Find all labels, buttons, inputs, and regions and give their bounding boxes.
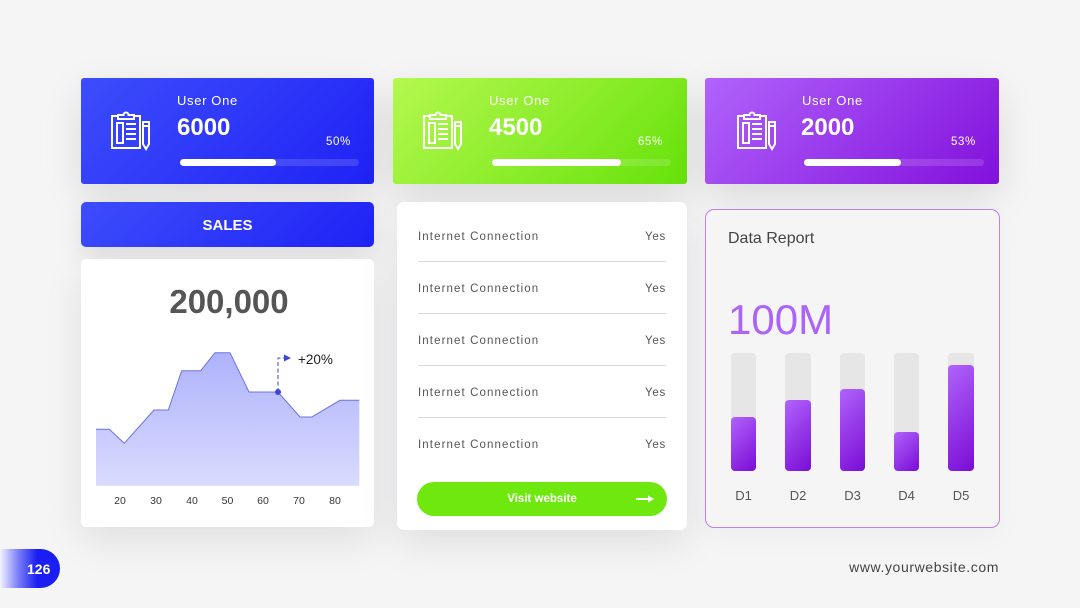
- panel: connection list: [397, 202, 687, 530]
- row 4: Yes: [645, 387, 666, 399]
- area chart: [96, 352, 360, 507]
- x axis labels: 70: [293, 495, 305, 507]
- bar D1: [731, 353, 756, 471]
- icon: arrow: [636, 496, 654, 502]
- x axis labels: 80: [329, 495, 341, 507]
- percent: 53%: [951, 136, 976, 148]
- label: user: User One: [802, 93, 863, 108]
- value: 2000: [801, 114, 854, 141]
- panel title: Data Report: [728, 230, 814, 247]
- panel: data report: [705, 209, 1000, 528]
- x axis labels: 20: [114, 495, 126, 507]
- x axis labels: [114, 495, 341, 507]
- row 1: Yes: [645, 231, 666, 243]
- bar labels: D3: [844, 488, 861, 503]
- label: user: User One: [489, 93, 550, 108]
- x axis labels: 30: [150, 495, 162, 507]
- callout value: +20%: [298, 352, 333, 367]
- icon: clipboard and pencil: [423, 112, 462, 151]
- bar D5: [948, 353, 974, 471]
- bar labels: D2: [790, 488, 806, 503]
- percent: 50%: [326, 136, 351, 148]
- x axis labels: 60: [257, 495, 269, 507]
- row 2: Yes: [645, 283, 666, 295]
- row 1: Internet Connection: [418, 231, 539, 243]
- progress bar: [180, 159, 359, 166]
- progress bar: [804, 159, 984, 166]
- icon: clipboard and pencil: [737, 112, 776, 151]
- heading: sales banner: SALES: [202, 217, 252, 234]
- panel: user card purple: [705, 78, 999, 184]
- value: 4500: [489, 114, 542, 141]
- x axis labels: 50: [222, 495, 233, 507]
- footer url: www.yourwebsite.com: [849, 559, 999, 575]
- bar labels: D5: [953, 488, 969, 503]
- panel: user card green: [393, 78, 687, 184]
- value: 6000: [177, 114, 230, 141]
- row 4: [418, 387, 666, 399]
- bar labels: D4: [898, 488, 915, 503]
- row 3: Yes: [645, 335, 666, 347]
- bar D3: [840, 353, 865, 471]
- big value: 100M: [728, 296, 833, 343]
- row 4: Internet Connection: [418, 387, 539, 399]
- row 3: Internet Connection: [418, 335, 539, 347]
- sales total: 200,000: [169, 283, 289, 320]
- percent: 65%: [638, 136, 663, 148]
- row 3: [418, 335, 666, 347]
- row 2: [418, 283, 666, 295]
- panel: sales chart: [81, 259, 374, 527]
- bar labels: D1: [735, 488, 752, 503]
- row 5: Internet Connection: [418, 439, 539, 451]
- row 1: [418, 231, 666, 243]
- bar D4: [894, 353, 919, 471]
- icon: clipboard and pencil: [111, 112, 150, 151]
- button label: Visit website: [507, 493, 577, 505]
- x axis labels: 40: [186, 495, 198, 507]
- button: visit website: [417, 482, 667, 516]
- panel: user card blue: [81, 78, 374, 184]
- bar labels: [735, 488, 969, 503]
- callout marker: [275, 354, 291, 395]
- heading: sales banner: [81, 202, 374, 247]
- progress bar: [492, 159, 671, 166]
- row 5: [418, 439, 666, 451]
- row 5: Yes: [645, 439, 666, 451]
- row 2: Internet Connection: [418, 283, 539, 295]
- bar D2: [785, 353, 811, 471]
- page number tab: 126: [27, 561, 50, 577]
- label: user: User One: [177, 93, 238, 108]
- bar chart: [731, 353, 974, 503]
- page number tab: [0, 549, 60, 588]
